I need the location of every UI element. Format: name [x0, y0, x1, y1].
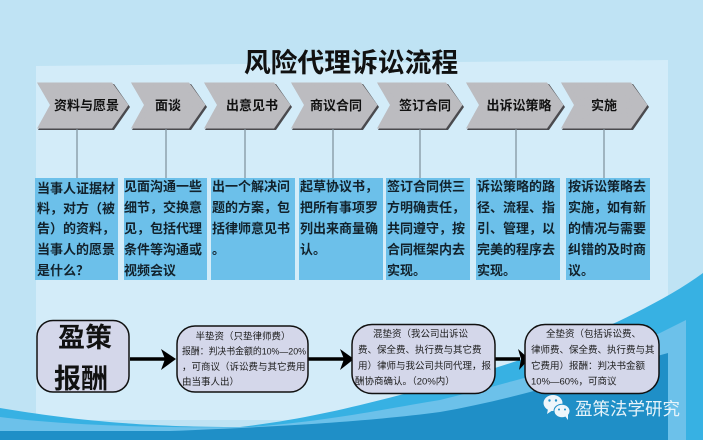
step 5 chevron: 签订合同: 签订合同 [399, 98, 451, 113]
step 5 chevron: 签订合同 [377, 82, 464, 130]
step 3 chevron: 出意见书: 出意见书 [226, 98, 278, 113]
panel: 出诉讼策略 description [476, 178, 560, 280]
panel: 商议合同 description: 把所有事项罗 [300, 200, 378, 215]
box: 混垫资: 费、保全费、执行费与其它费 [358, 344, 482, 356]
step 4 chevron: 商议合同 [291, 82, 379, 130]
panel: 面谈 description: 视频会议 [124, 263, 176, 278]
step 1 chevron: 资料与愿景 [37, 82, 130, 130]
panel: 签订合同 description: 合同框架内去 [387, 242, 465, 257]
panel: 签订合同 description: 共同遵守，按 [387, 221, 465, 236]
panel: 实施 description: 的情况与需要 [568, 221, 646, 236]
panel: 面谈 description: 见面沟通一些 [124, 179, 202, 194]
panel: 出诉讼策略 description: 径、流程、指 [477, 200, 555, 215]
panel: 出诉讼策略 description: 诉讼策略的路 [477, 179, 555, 194]
step 6 chevron: 出诉讼策略: 出诉讼策略 [486, 98, 552, 113]
panel: 资料与愿景 description: 料，对方（被 [37, 201, 115, 216]
panel: 资料与愿景 description: 是什么？ [37, 263, 89, 278]
panel: 商议合同 description [299, 178, 383, 280]
panel: 资料与愿景 description [35, 178, 118, 280]
box: 半垫资: 由当事人出） [182, 376, 239, 388]
step 7 chevron: 实施 [561, 82, 649, 130]
panel: 出诉讼策略 description: 实现。 [477, 263, 516, 278]
step 4 chevron: 商议合同: 商议合同 [310, 98, 362, 113]
watermark: 盈策法学研究 [544, 395, 680, 420]
panel: 实施 description: 按诉讼策略去 [568, 179, 646, 194]
panel: 实施 description [566, 178, 650, 280]
box: 半垫资: ，可商议（诉讼费与其它费用 [182, 361, 306, 373]
panel: 出意见书 description: 括律师意见书 [212, 221, 290, 236]
icon: wechat [544, 395, 570, 420]
box: 混垫资 [352, 324, 495, 394]
panel: 出意见书 description [211, 178, 295, 280]
step 7 chevron: 实施: 实施 [591, 98, 617, 113]
panel: 商议合同 description: 认。 [300, 242, 326, 257]
connector lines [77, 129, 604, 178]
panel: 签订合同 description: 实现。 [387, 263, 426, 278]
box: 全垫资: 它费用）报酬：判决书金额 [531, 360, 646, 372]
panel: 签订合同 description: 签订合同供三 [387, 179, 465, 194]
box: 半垫资 [177, 326, 308, 392]
panel: 签订合同 description: 方明确责任， [387, 200, 465, 215]
panel: 资料与愿景 description: 当事人的愿景 [37, 242, 115, 257]
step 6 chevron: 出诉讼策略 [466, 82, 565, 130]
panel: 商议合同 description: 列出来商量确 [300, 221, 378, 236]
panel: 面谈 description: 条件等沟通或 [124, 242, 202, 257]
panel: 实施 description: 实施，如有新 [568, 200, 646, 215]
box: 半垫资: 报酬：判决书金额的10%—20% [182, 346, 307, 358]
box: 混垫资: 混垫资（我公司出诉讼 [373, 328, 469, 340]
panel: 出意见书 description: 。 [212, 242, 225, 257]
box: 全垫资 [525, 324, 659, 394]
box: 全垫资: 全垫资（包括诉讼费、 [546, 328, 641, 340]
panel: 出意见书 description: 出一个解决问 [212, 179, 290, 194]
step 2 chevron: 面谈: 面谈 [155, 98, 181, 113]
panel: 面谈 description [124, 178, 207, 280]
panel: 出诉讼策略 description: 完美的程序去 [477, 242, 555, 257]
box: 全垫资: 10%—60%，可商议 [531, 376, 617, 388]
box: 盈策报酬 [37, 320, 129, 394]
arrow: 半垫资 to 混垫资 [308, 349, 354, 370]
box: 全垫资: 律师费、保全费、执行费与其 [531, 344, 655, 356]
step 3 chevron: 出意见书 [204, 82, 292, 130]
box: 混垫资: 酬协商确认。（20%内） [355, 376, 455, 388]
panel: 商议合同 description: 起草协议书， [300, 179, 378, 194]
box: 半垫资: 半垫资（只垫律师费） [195, 330, 291, 342]
panel: 出诉讼策略 description: 引、管理，以 [477, 221, 555, 236]
box: 盈策报酬: 报酬 [54, 364, 108, 394]
description panels [35, 178, 650, 280]
title: 风险代理诉讼流程 [244, 47, 458, 78]
panel: 面谈 description: 见，包括代理 [124, 221, 202, 236]
step 1 chevron: 资料与愿景: 资料与愿景 [54, 98, 119, 113]
arrow: 混垫资 to 全垫资 [495, 349, 529, 370]
watermark text: 盈策法学研究 [575, 399, 680, 419]
box: 混垫资: 用）律师与我公司共同代理，报 [358, 360, 492, 372]
panel: 实施 description: 纠错的及时商 [568, 242, 646, 257]
panel: 签订合同 description [386, 178, 470, 280]
step 2 chevron: 面谈 [131, 82, 207, 130]
panel: 资料与愿景 description: 告）的资料， [37, 221, 115, 236]
panel: 资料与愿景 description: 当事人证据材 [37, 181, 115, 196]
panel: 面谈 description: 细节，交换意 [124, 200, 202, 215]
process chevrons [37, 82, 649, 130]
arrow: 盈策报酬 to 半垫资 [130, 349, 176, 370]
panel: 出意见书 description: 题的方案，包 [212, 200, 290, 215]
box: 盈策报酬: 盈策 [58, 323, 112, 353]
panel: 实施 description: 议。 [568, 263, 594, 278]
